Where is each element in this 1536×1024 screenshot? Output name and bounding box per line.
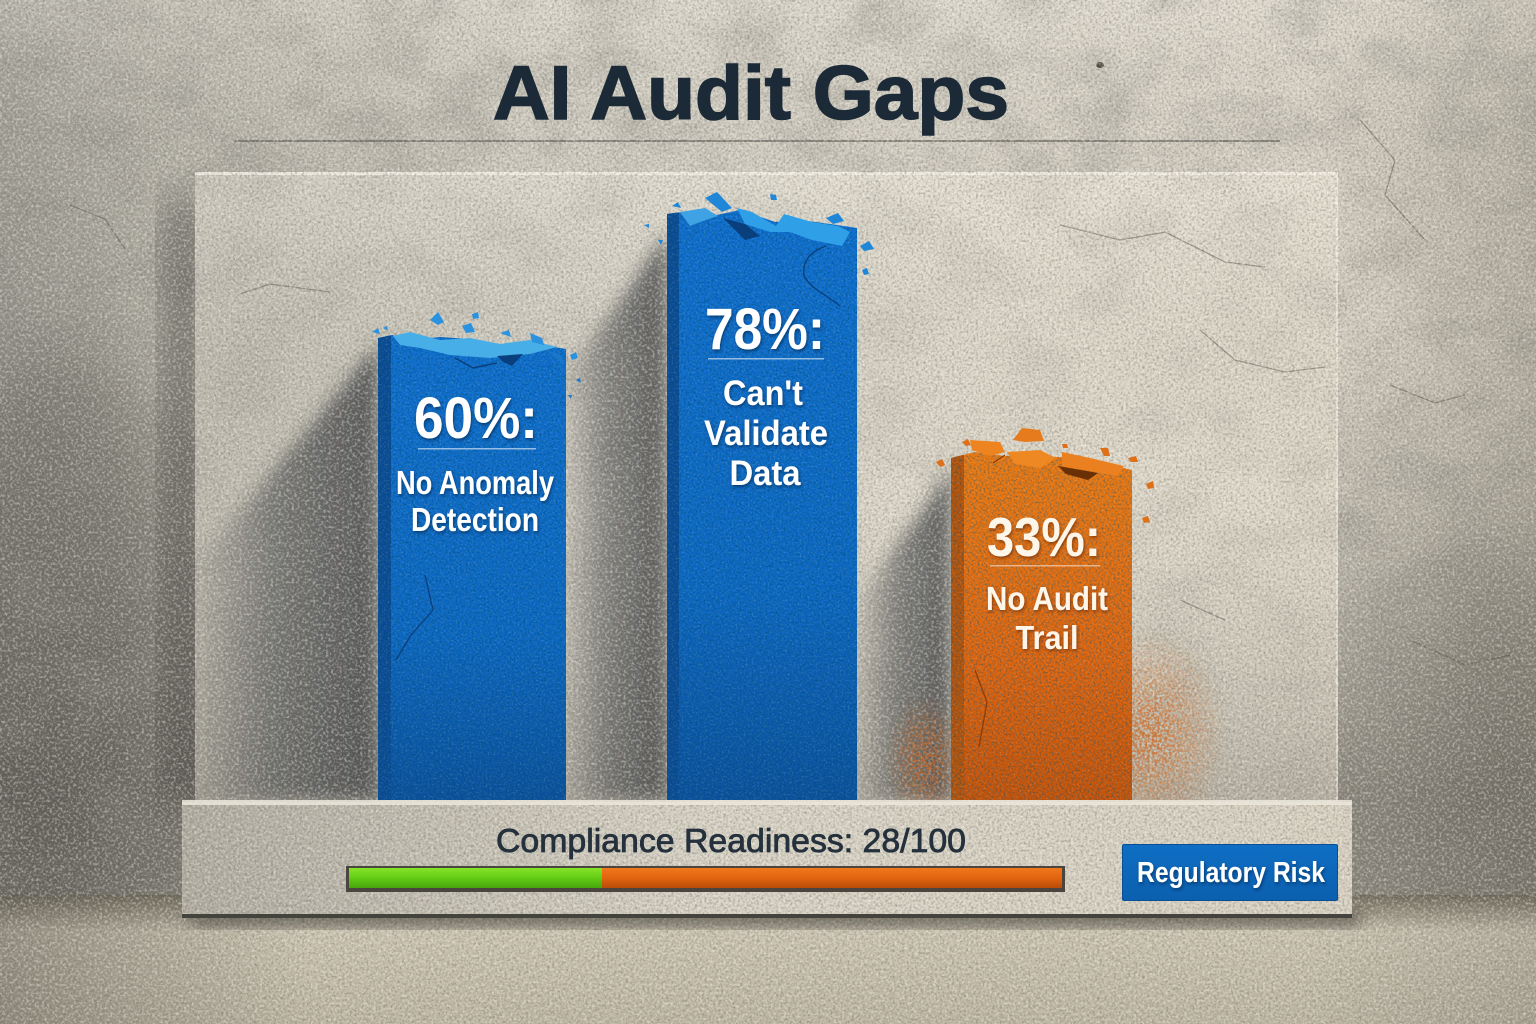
label: Validate: Validate: [704, 414, 828, 453]
panel: chart backdrop: [160, 172, 1338, 804]
ledge: compliance base: [182, 800, 1360, 928]
compliance heading: Compliance Readiness: 28/100: [496, 822, 966, 859]
label: No Audit: No Audit: [986, 580, 1108, 617]
floor: [0, 895, 1536, 1024]
bar: 60% No Anomaly Detection: [372, 312, 581, 800]
label: 33%: 33%:: [987, 506, 1101, 568]
label: 78%: 78%:: [705, 297, 825, 362]
bar: 78% Can't Validate Data: [644, 192, 874, 800]
title underline: [235, 140, 1280, 142]
label: Detection: Detection: [411, 501, 539, 538]
bar: 33% No Audit Trail: [936, 428, 1154, 800]
orange dust: [887, 630, 1225, 840]
label: 60%: 60%:: [414, 386, 538, 451]
divider: 60%: [418, 448, 536, 450]
label: Trail: Trail: [1016, 619, 1078, 656]
bar shadows: [198, 235, 951, 800]
divider: 33%: [990, 565, 1100, 566]
badge: Regulatory Risk: [1122, 844, 1338, 901]
title: AI Audit Gaps: [493, 51, 1009, 136]
badge: Regulatory Risk: Regulatory Risk: [1137, 857, 1326, 889]
label: Can't: Can't: [723, 374, 803, 413]
divider: 78%: [708, 358, 824, 360]
label: Data: Data: [730, 454, 801, 493]
label: No Anomaly: No Anomaly: [396, 464, 555, 501]
progress bar: [346, 866, 1065, 892]
